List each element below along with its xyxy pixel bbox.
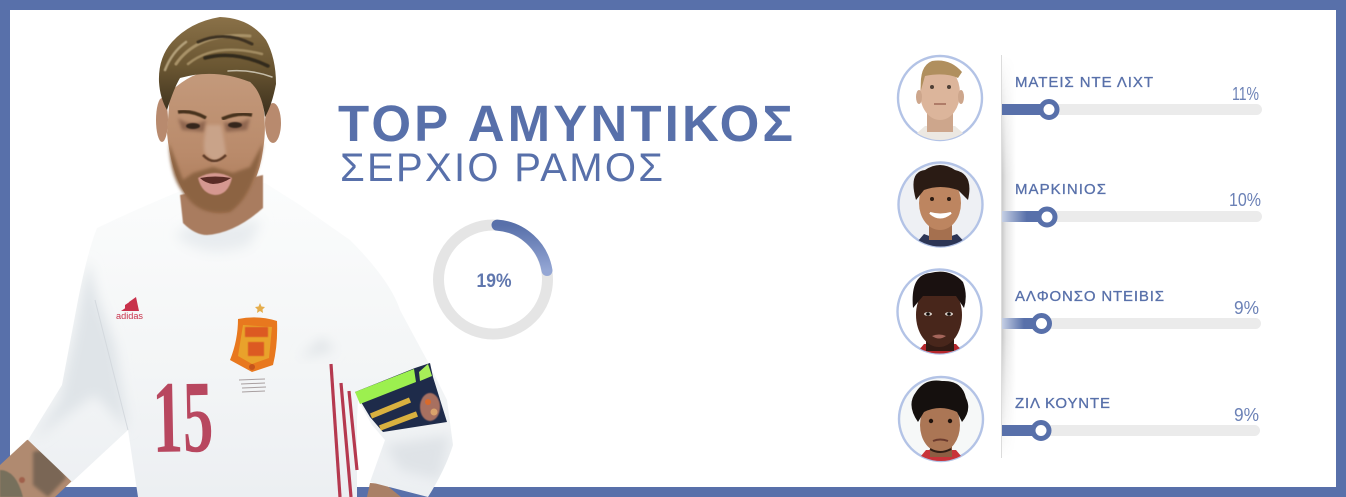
value: 9% <box>1234 405 1259 425</box>
captain armband <box>355 363 447 432</box>
bar <box>1002 422 1260 438</box>
row: Matthijs de Ligt <box>898 56 1262 141</box>
row: Jules Kounde <box>899 377 1260 462</box>
bar <box>1002 209 1262 225</box>
beard <box>169 143 263 213</box>
row: Alphonso Davies <box>898 270 1261 355</box>
value: 10% <box>1229 190 1261 210</box>
ears <box>156 98 281 143</box>
shirt number: 15 <box>151 361 214 475</box>
hair <box>159 17 276 117</box>
name: ΖΙΛ ΚΟΥΝΤΕ <box>1015 395 1110 412</box>
donut chart: 19% <box>438 225 548 334</box>
title: TOP ΑΜΥΝΤΙΚΟΣ <box>338 95 793 152</box>
eyes and brows <box>178 112 252 132</box>
crest star <box>255 303 265 313</box>
vertical divider <box>1001 55 1013 458</box>
white shirt <box>28 216 453 497</box>
bar <box>1002 316 1261 332</box>
player photo illustration: Sergio Ramos <box>0 17 453 497</box>
right hand <box>367 483 401 497</box>
adidas logo: adidas <box>116 311 143 321</box>
avatar <box>898 56 982 141</box>
subtitle: ΣΕΡΧΙΟ ΡΑΜΟΣ <box>340 146 663 190</box>
name: ΜΑΤΕΙΣ ΝΤΕ ΛΙΧΤ <box>1015 74 1153 91</box>
face <box>167 70 265 213</box>
red side stripes <box>331 364 357 497</box>
neck <box>180 175 263 235</box>
Spain crest <box>230 317 277 372</box>
match detail text <box>239 379 266 392</box>
value: 11% <box>1232 84 1259 104</box>
value: 9% <box>1234 298 1259 318</box>
donut value: 19% <box>476 271 512 292</box>
left forearm with tattoos <box>0 437 73 497</box>
avatar <box>899 377 983 462</box>
name: ΜΑΡΚΙΝΙΟΣ <box>1015 181 1106 198</box>
nose <box>203 125 226 163</box>
bar <box>1002 102 1262 118</box>
name: ΑΛΦΟΝΣΟ ΝΤΕΙΒΙΣ <box>1015 288 1164 305</box>
adidas logo <box>116 297 143 321</box>
mouth <box>198 173 232 195</box>
row: Marquinhos <box>898 162 1262 248</box>
avatar <box>898 162 982 248</box>
avatar <box>898 270 982 355</box>
